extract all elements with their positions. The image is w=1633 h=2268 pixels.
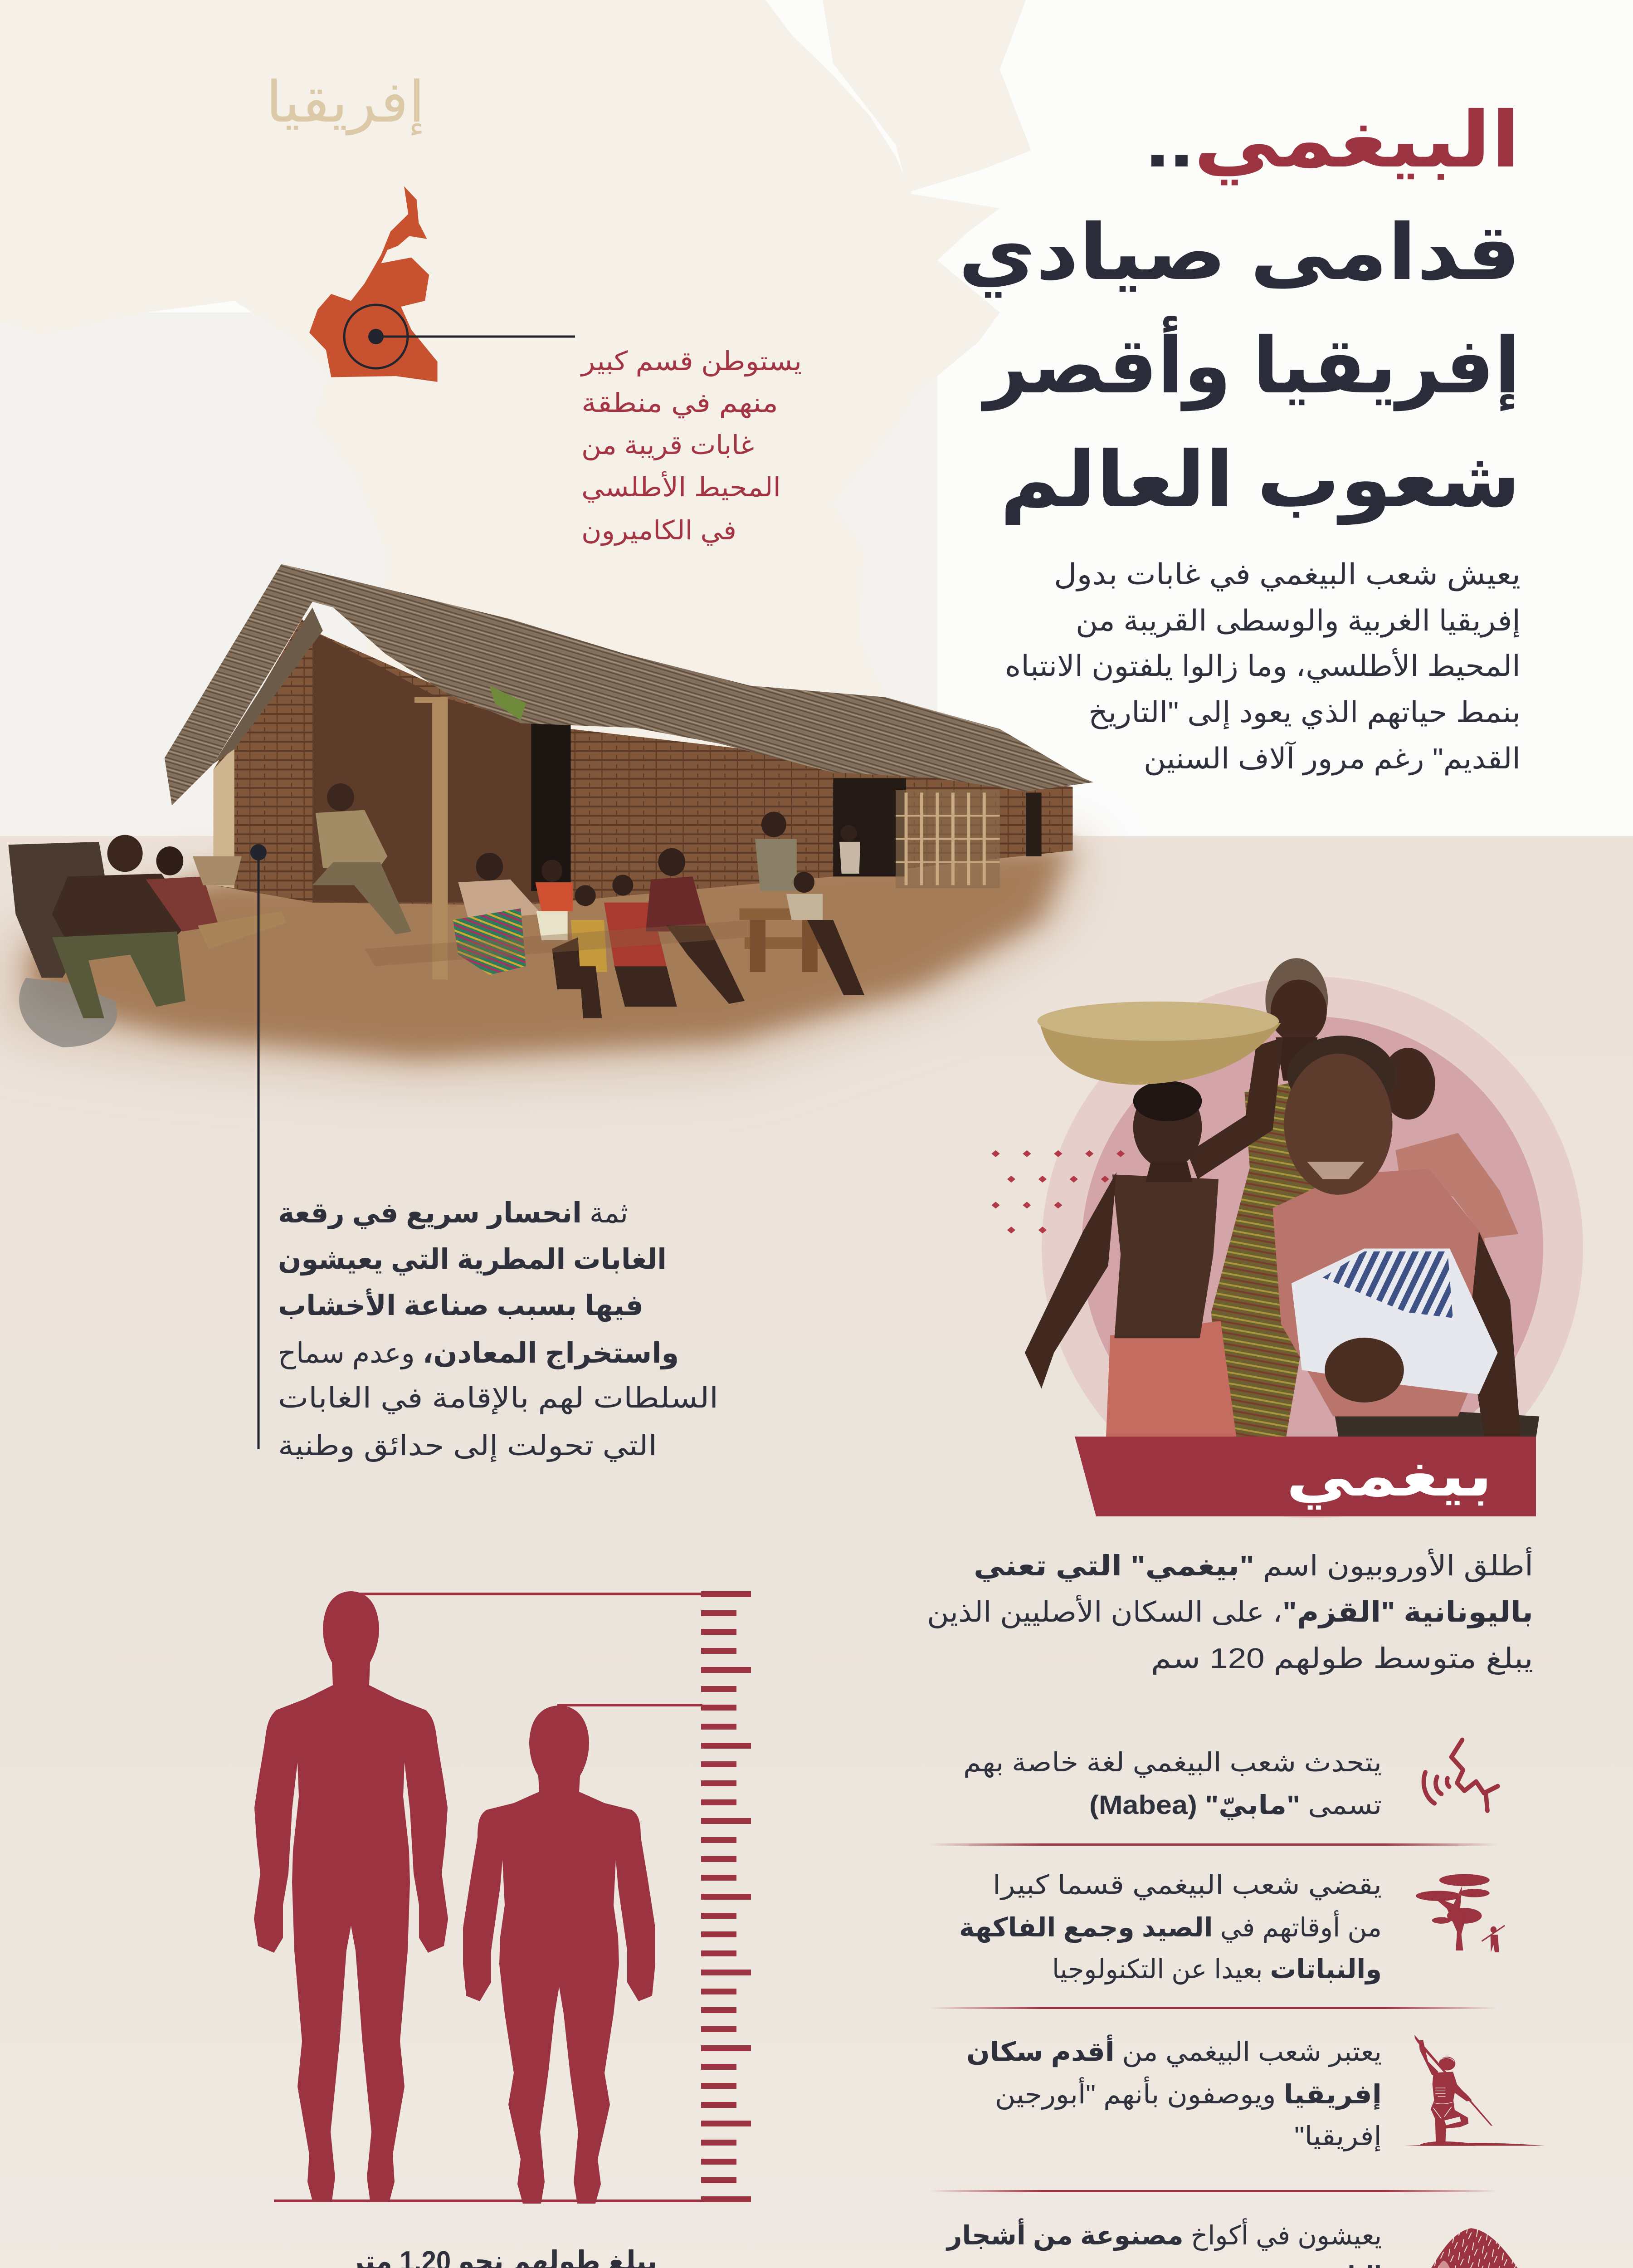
icon: bamboo hut — [1423, 2228, 1526, 2268]
title — [958, 97, 1521, 525]
house roof — [165, 564, 1093, 805]
text: forest decline: الغابات المطرية التي يعيشون — [278, 1244, 667, 1276]
text — [963, 1748, 1382, 1820]
text: forest decline: السلطات لهم بالإقامة في الغابات — [278, 1383, 718, 1415]
callout: Cameroon location: في الكاميرون — [581, 516, 736, 546]
icon: tree and hunter — [1416, 1874, 1505, 1952]
text: forest decline — [278, 1198, 718, 1462]
callout: Cameroon location: يستوطن قسم كبير — [580, 347, 802, 377]
text: name origin: يبلغ متوسط طولهم 120 سم — [1151, 1643, 1533, 1675]
text: name origin: أطلق الأوروبيون اسم "بيغمي" التي تعني — [974, 1547, 1533, 1582]
large girl with bundle — [1272, 1036, 1539, 1437]
map: Cameroon — [309, 186, 575, 382]
sitting woman — [646, 848, 745, 1004]
intro text: يعيش شعب البيغمي في غابات بدول — [1054, 558, 1521, 591]
map: Africa backdrop — [0, 0, 1083, 891]
boy with bowl — [1025, 1002, 1283, 1437]
text: forest decline: فيها بسبب صناعة الأخشاب — [278, 1288, 643, 1322]
woman in colourful skirt — [453, 853, 541, 975]
text: والنباتات بعيدا عن التكنولوجيا — [1052, 1955, 1382, 1985]
intro text: القديم" رغم مرور آلاف السنين — [1144, 741, 1521, 776]
photo: village house and people — [0, 564, 1093, 1082]
child behind — [1381, 1048, 1518, 1238]
seated man — [312, 783, 411, 934]
icon: hunter — [1404, 2035, 1545, 2146]
back girl — [1211, 958, 1328, 1437]
text: يعتبر شعب البيغمي من أقدم سكان — [966, 2034, 1382, 2068]
text: forest decline: واستخراج المعادن، وعدم سماح — [278, 1338, 679, 1369]
title: قدامى صيادي — [958, 210, 1521, 298]
callout: Cameroon location — [580, 347, 802, 546]
height ruler — [274, 1591, 751, 2202]
figure: Pygmy silhouette — [463, 1706, 655, 2204]
intro text — [1005, 558, 1521, 776]
figure: average man silhouette — [254, 1591, 448, 2201]
label: Africa: إفريقيا — [266, 71, 425, 136]
house walls — [214, 619, 1072, 905]
photo: Pygmy children — [1025, 958, 1539, 1437]
title: البيغمي.. — [1146, 97, 1521, 186]
intro text: المحيط الأطلسي، وما زالوا يلفتون الانتباه — [1005, 648, 1521, 683]
list item: huts — [946, 2218, 1526, 2268]
list item: oldest inhabitants — [966, 2034, 1545, 2152]
title: إفريقيا وأقصر — [980, 316, 1521, 411]
text: إفريقيا" — [1294, 2121, 1382, 2152]
text: إفريقيا ويوصفون بأنهم "أبورجين — [995, 2076, 1382, 2110]
title: شعوب العالم — [1000, 437, 1521, 525]
list item: hunting — [959, 1870, 1505, 1985]
text — [946, 2218, 1382, 2268]
text: يتحدث شعب البيغمي لغة خاصة بهم — [963, 1748, 1382, 1778]
text: يقضي شعب البيغمي قسما كبيرا — [993, 1870, 1382, 1901]
list item: language — [963, 1740, 1498, 1820]
banner: Pygmy: بيغمي — [1286, 1443, 1492, 1510]
callout: Cameroon location: المحيط الأطلسي — [581, 471, 781, 503]
text: forest decline: التي تحولت إلى حدائق وطنية — [278, 1430, 657, 1462]
text: name origin — [927, 1547, 1533, 1675]
banner: Pygmy — [1075, 1437, 1536, 1516]
callout line — [250, 844, 267, 1449]
wheelbarrow and two men — [8, 835, 287, 1047]
text: من أوقاتهم في الصيد وجمع الفاكهة — [959, 1910, 1382, 1943]
callout: Cameroon location: غابات قريبة من — [581, 430, 754, 461]
intro text: إفريقيا الغربية والوسطى القريبة من — [1076, 604, 1521, 638]
intro text: بنمط حياتهم الذي يعود إلى "التاريخ — [1088, 696, 1521, 729]
text: forest decline: ثمة انحسار سريع في رقعة — [278, 1198, 628, 1229]
text: تسمى "مابيّ" (Mabea) — [1089, 1790, 1382, 1820]
decorative circles — [1042, 977, 1583, 1518]
child on bench — [740, 872, 864, 995]
lower panel background — [0, 836, 1633, 2268]
text: name origin: باليونانية "القزم"، على السكان الأصليين الذين — [927, 1594, 1533, 1629]
woman by the door — [755, 812, 860, 891]
children — [535, 860, 677, 1018]
text — [959, 1870, 1382, 1985]
callout: Cameroon location: منهم في منطقة — [581, 388, 778, 419]
icon: speaking face — [1423, 1740, 1498, 1811]
dot pattern — [991, 1150, 1216, 1233]
post — [414, 697, 448, 979]
text — [966, 2034, 1382, 2152]
text: يعيشون في أكواخ مصنوعة من أشجار — [946, 2218, 1382, 2251]
